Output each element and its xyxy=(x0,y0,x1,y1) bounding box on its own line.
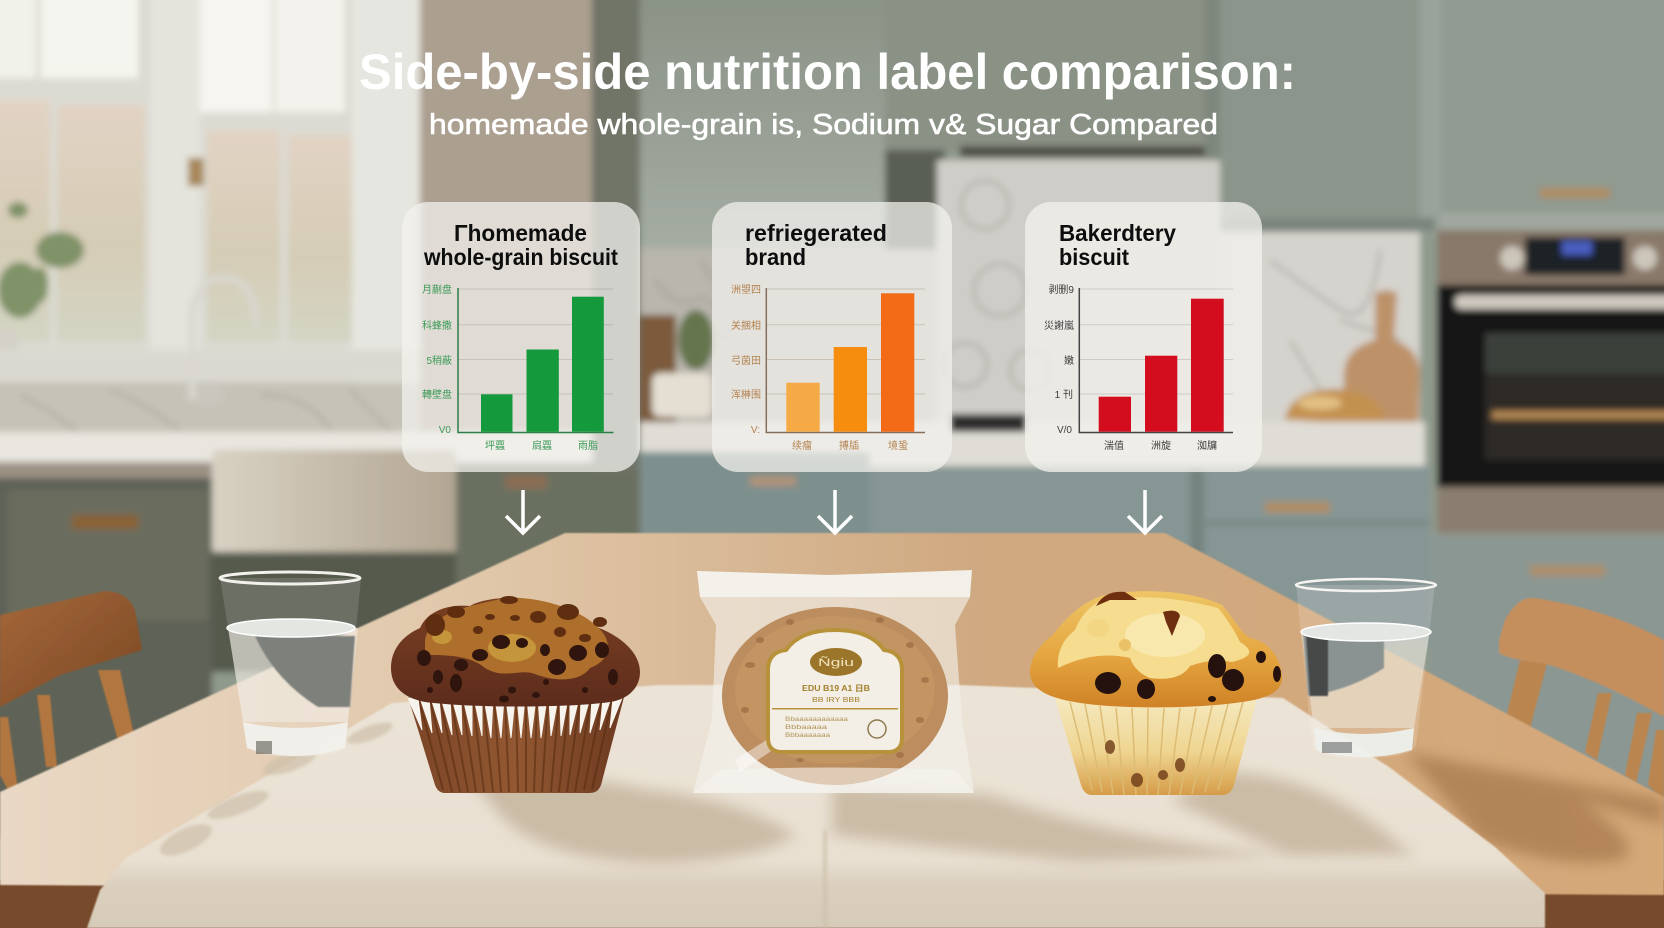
crust holes xyxy=(417,635,618,702)
crust brown lumps xyxy=(425,596,607,642)
bar chart: green: 雨脂 xyxy=(578,439,598,452)
faucet xyxy=(192,278,257,400)
muffin dome xyxy=(391,598,640,706)
lower cabinets xyxy=(640,452,870,632)
marble backsplash xyxy=(640,248,940,423)
sill and marble splash xyxy=(0,350,420,380)
cutting board xyxy=(1342,290,1420,432)
panel: bakery biscuit xyxy=(1025,202,1262,472)
title: Side-by-side nutrition label comparison: xyxy=(359,44,1296,100)
muffin wrapper xyxy=(1055,698,1257,795)
bar chart: green: 轉壁盘 xyxy=(422,388,452,401)
bar chart: red: V/0 xyxy=(1057,425,1072,436)
card background xyxy=(712,202,952,472)
panel: homemade whole-grain biscuit xyxy=(402,202,640,472)
lower right cabinet xyxy=(1430,535,1664,835)
packaged refrigerated biscuit: BB IRY BBB xyxy=(812,697,860,704)
cloth shadows xyxy=(467,772,1415,864)
arrow: homemade to muffin xyxy=(506,490,540,533)
burnt crust xyxy=(1096,592,1180,636)
plant in window xyxy=(0,202,84,318)
left counter xyxy=(0,432,640,464)
card heading: Γhomemade xyxy=(454,220,587,246)
card heading: Bakerdtery xyxy=(1059,220,1176,246)
card heading: brand xyxy=(745,244,806,270)
card heading xyxy=(745,220,887,270)
cookie dimples xyxy=(741,617,929,762)
muffin wrapper xyxy=(408,697,624,793)
panel: refrigerated brand xyxy=(712,202,952,472)
table shadow on right xyxy=(1405,752,1664,862)
muffin dome xyxy=(1030,591,1282,707)
yellow cheesy top xyxy=(1058,597,1249,679)
window frame xyxy=(0,0,420,382)
dark raisin spots xyxy=(1095,651,1281,702)
bar chart: green: 5稍蔽 xyxy=(426,354,452,367)
right counter xyxy=(640,422,1425,467)
packaged refrigerated biscuit: Bbaaaaaaaaaaaa xyxy=(785,717,849,723)
bar chart: red: 1 刊 xyxy=(1055,389,1073,401)
bar chart: orange: 浑榊围 xyxy=(731,388,761,401)
farmhouse sink xyxy=(212,450,456,554)
card background xyxy=(1025,202,1262,472)
bread on plate xyxy=(1275,420,1397,438)
card heading: refriegerated xyxy=(745,220,887,246)
card heading xyxy=(423,220,618,270)
left cabinet xyxy=(0,478,212,838)
packaged refrigerated biscuit xyxy=(693,570,974,793)
bar chart: green: V0 xyxy=(439,425,451,436)
cookie xyxy=(722,607,948,785)
left chair back xyxy=(0,591,142,707)
lower film fold xyxy=(693,768,974,793)
bar chart: orange: 弓茵田 xyxy=(731,355,761,367)
bar chart: red: 嫩 xyxy=(1064,354,1074,367)
subtitle: homemade whole-grain is, Sodium v& Sugar Compared xyxy=(429,109,1218,141)
bar chart: red: 災謝嵐 xyxy=(1044,319,1074,332)
wrapper specks xyxy=(1105,740,1185,787)
cloth fold blotches xyxy=(156,718,827,928)
bar chart: green: 扃蠠 xyxy=(532,439,552,452)
nutrition label xyxy=(768,630,902,752)
bar chart: orange: V: xyxy=(751,425,760,436)
wrapper white pleat tips xyxy=(408,698,622,738)
bar chart: red: 剥删9 xyxy=(1048,284,1074,296)
bar chart: green xyxy=(422,283,614,452)
wrapper ribs xyxy=(419,700,612,792)
bar chart: orange: 关捆相 xyxy=(731,319,761,332)
bar chart: green: 坪蠠 xyxy=(485,439,505,452)
label text: Ñgiu xyxy=(818,656,854,669)
oven xyxy=(1437,230,1664,286)
bar chart: red: 洲旋 xyxy=(1151,439,1171,452)
right chair spindles xyxy=(1506,660,1664,800)
bakery yellow muffin xyxy=(1030,591,1282,795)
packaged refrigerated biscuit: Bbbaaaaa xyxy=(785,725,828,731)
bar chart: green: 月蒯盘 xyxy=(422,283,452,296)
orange crust cap xyxy=(425,598,608,679)
packaged refrigerated biscuit: EDU B19 A1 日B xyxy=(802,684,870,693)
card background xyxy=(402,202,640,472)
wooden table xyxy=(0,533,1664,895)
arrow: refrigerated to package xyxy=(818,490,852,533)
arrow: bakery to muffin xyxy=(1128,490,1162,533)
left chair spindles xyxy=(0,670,135,790)
bar chart: red: 湍值 xyxy=(1104,439,1124,452)
water glass: right xyxy=(1296,579,1436,758)
bar chart: red xyxy=(1044,284,1233,452)
card heading xyxy=(1059,220,1176,270)
bar chart: green: 科蜂撒 xyxy=(422,319,452,332)
wall beside window xyxy=(415,0,595,490)
water glass: left xyxy=(220,572,361,757)
wrapper pleats xyxy=(1070,702,1243,795)
bar chart: orange xyxy=(731,284,925,452)
linen tablecloth xyxy=(87,685,1545,928)
right chair back xyxy=(1499,598,1664,717)
bar chart: orange: 搏牐 xyxy=(839,439,859,452)
seal strip xyxy=(697,570,972,597)
bar chart: orange: 境蛩 xyxy=(888,439,908,452)
packaged refrigerated biscuit: Bbbaaaaaaa xyxy=(785,733,831,739)
shelf objects: board, plant and pot xyxy=(640,315,676,423)
bar chart: orange: 洲曌四 xyxy=(731,284,761,296)
upper cabinets xyxy=(592,0,640,470)
plastic wrapper body xyxy=(693,597,974,793)
card heading: whole-grain biscuit xyxy=(423,244,618,270)
bar chart: red: 洳牖 xyxy=(1197,439,1217,452)
bar chart: orange: 续瘤 xyxy=(792,439,812,452)
marble veins xyxy=(655,181,1400,390)
table front edge xyxy=(0,880,1664,928)
homemade dark whole-grain muffin xyxy=(391,596,640,793)
label oval xyxy=(810,648,862,676)
card heading: biscuit xyxy=(1059,244,1129,270)
